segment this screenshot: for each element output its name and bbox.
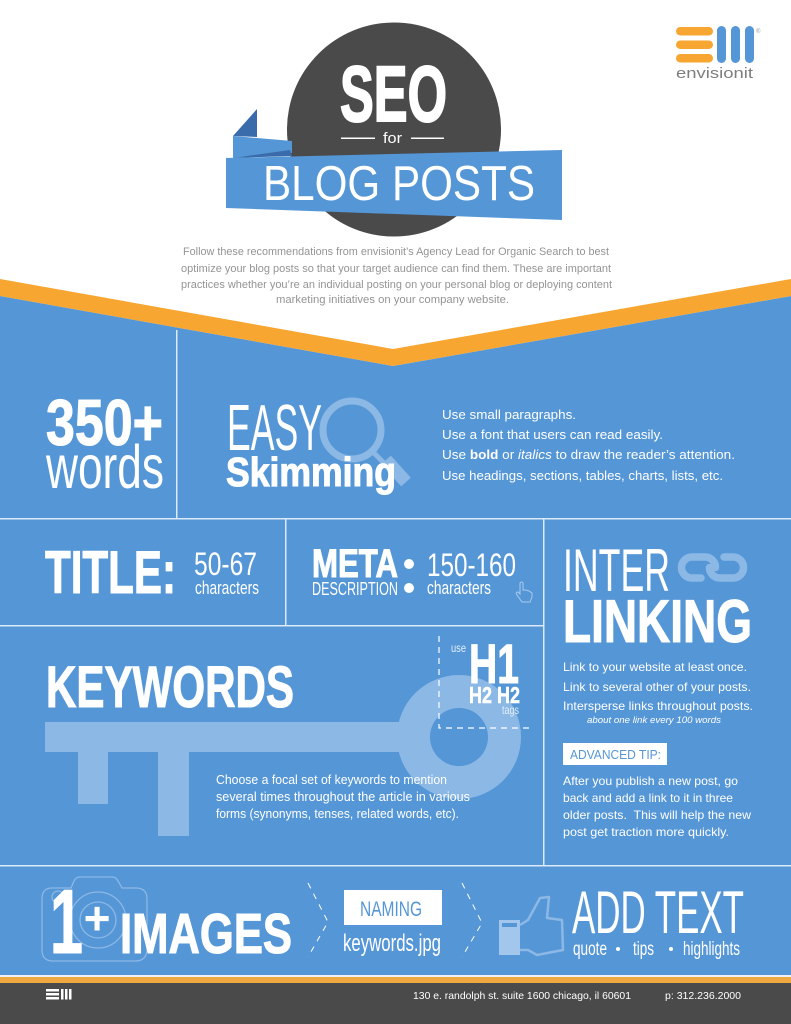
- envisionit logo: envisionit: [676, 65, 754, 82]
- icon: chain link: [682, 557, 744, 578]
- advanced tip text: post get traction more quickly.: [563, 825, 729, 839]
- advanced tip label: [563, 743, 667, 765]
- Skimming: Skimming: [226, 449, 396, 495]
- link tips: Link to several other of your posts.: [563, 680, 751, 694]
- blue background panel: [0, 296, 791, 977]
- footer logo: [46, 989, 72, 1000]
- arrow: second chevron: [462, 883, 482, 957]
- characters: characters: [195, 578, 259, 598]
- skimming tips: [442, 407, 735, 483]
- IMAGES: IMAGES: [120, 902, 292, 966]
- for label: for: [383, 130, 402, 147]
- words: words: [45, 433, 164, 501]
- ribbon fold: [233, 109, 257, 137]
- keyword text: forms (synonyms, tenses, related words, etc).: [216, 807, 459, 821]
- envisionit logo: ®: [756, 28, 761, 35]
- KEYWORDS heading: KEYWORDS: [46, 655, 294, 720]
- keywords.jpg: keywords.jpg: [343, 930, 441, 957]
- ribbon front: [226, 150, 562, 220]
- SEO heading: SEO: [340, 49, 447, 138]
- intro text: practices whether you’re an individual posting on your personal blog or deploying content: [181, 279, 612, 291]
- INTER: INTER: [563, 537, 670, 604]
- skimming tips: Use a font that users can read easily.: [442, 427, 663, 442]
- for label: [341, 130, 444, 147]
- icon: pointer hand: [516, 582, 532, 602]
- intro text: [181, 246, 612, 306]
- intro text: marketing initiatives on your company website.: [276, 294, 509, 306]
- H1: H1: [469, 632, 519, 695]
- header badge: [226, 22, 562, 236]
- link tips: [563, 660, 753, 726]
- dark circle: [287, 22, 501, 236]
- TITLE: TITLE:: [45, 539, 176, 606]
- add text options: quote: [573, 939, 607, 960]
- footer phone: p: 312.236.2000: [665, 990, 741, 1002]
- intro text: Follow these recommendations from envisionit’s Agency Lead for Organic Search to best: [183, 246, 609, 258]
- DESCRIPTION: DESCRIPTION: [312, 579, 398, 599]
- panel: easy skimming: [226, 391, 735, 495]
- naming box: NAMING: [360, 898, 422, 921]
- advanced tip text: After you publish a new post, go: [563, 774, 738, 788]
- advanced tip text: older posts. This will help the new: [563, 808, 751, 822]
- add text options: tips: [633, 939, 654, 960]
- skimming tips: Use bold or italics to draw the reader’s attention.: [442, 447, 735, 462]
- tags: tags: [502, 703, 519, 717]
- H2 H2: H2 H2: [469, 682, 520, 708]
- icon: thumbs up: [499, 897, 563, 955]
- arrow: first chevron: [308, 883, 328, 957]
- crop marks: [439, 636, 529, 728]
- ribbon back: [233, 136, 292, 158]
- panel: word count: [45, 386, 164, 501]
- panel: keywords: [45, 632, 529, 836]
- ribbon shadow: [233, 150, 292, 158]
- footer address: 130 e. randolph st. suite 1600 chicago, il 60601: [413, 990, 631, 1002]
- EASY: EASY: [227, 391, 322, 464]
- 1+: +: [84, 892, 110, 944]
- naming box: [344, 890, 442, 925]
- use: use: [451, 641, 466, 655]
- keyword text: several times throughout the article in various: [216, 790, 470, 804]
- add text options: [573, 939, 740, 960]
- 350+: 350+: [46, 386, 163, 459]
- link tips: about one link every 100 words: [587, 715, 721, 726]
- icon: magnifying glass: [323, 401, 406, 482]
- panel: title: [45, 539, 259, 606]
- advanced tip text: back and add a link to it in three: [563, 791, 733, 805]
- BLOG POSTS heading: BLOG POSTS: [263, 157, 535, 211]
- advanced tip text: [563, 774, 751, 839]
- panel: meta description: [312, 542, 532, 602]
- link tips: Intersperse links throughout posts.: [563, 699, 753, 713]
- intro text: optimize your blog posts so that your target audience can find them. These are important: [181, 263, 611, 275]
- panel: images: [42, 872, 292, 973]
- key graphic: [45, 675, 521, 836]
- 50-67: 50-67: [194, 546, 257, 582]
- 1+: 1: [50, 872, 83, 973]
- orange chevron band: [0, 279, 791, 366]
- 150-160: 150-160: [427, 547, 516, 583]
- META: META: [312, 542, 398, 586]
- bullets: [404, 559, 414, 593]
- panel dividers: [0, 330, 791, 866]
- panel: interlinking: [563, 537, 753, 839]
- footer: [0, 975, 791, 1024]
- skimming tips: Use small paragraphs.: [442, 407, 576, 422]
- envisionit logo: [676, 26, 761, 82]
- link tips: Link to your website at least once.: [563, 660, 747, 674]
- keyword text: [216, 773, 470, 821]
- skimming tips: Use headings, sections, tables, charts, lists, etc.: [442, 468, 723, 483]
- icon: camera: [42, 877, 147, 961]
- add text options: highlights: [683, 939, 740, 960]
- advanced tip label: ADVANCED TIP:: [570, 747, 661, 762]
- characters: characters: [427, 578, 491, 598]
- keyword text: Choose a focal set of keywords to mention: [216, 773, 447, 787]
